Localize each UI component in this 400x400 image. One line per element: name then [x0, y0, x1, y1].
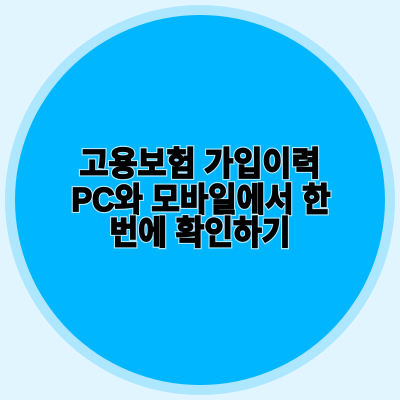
title: 고용보험 가입이력	[80, 145, 320, 182]
title: 번에 확인하기	[110, 214, 290, 251]
title: PC와 모바일에서 한	[72, 181, 330, 218]
title: PC와 모바일에서 한	[72, 181, 330, 218]
title: 고용보험 가입이력	[80, 145, 320, 182]
title	[72, 145, 330, 251]
title: 번에 확인하기	[110, 214, 290, 251]
